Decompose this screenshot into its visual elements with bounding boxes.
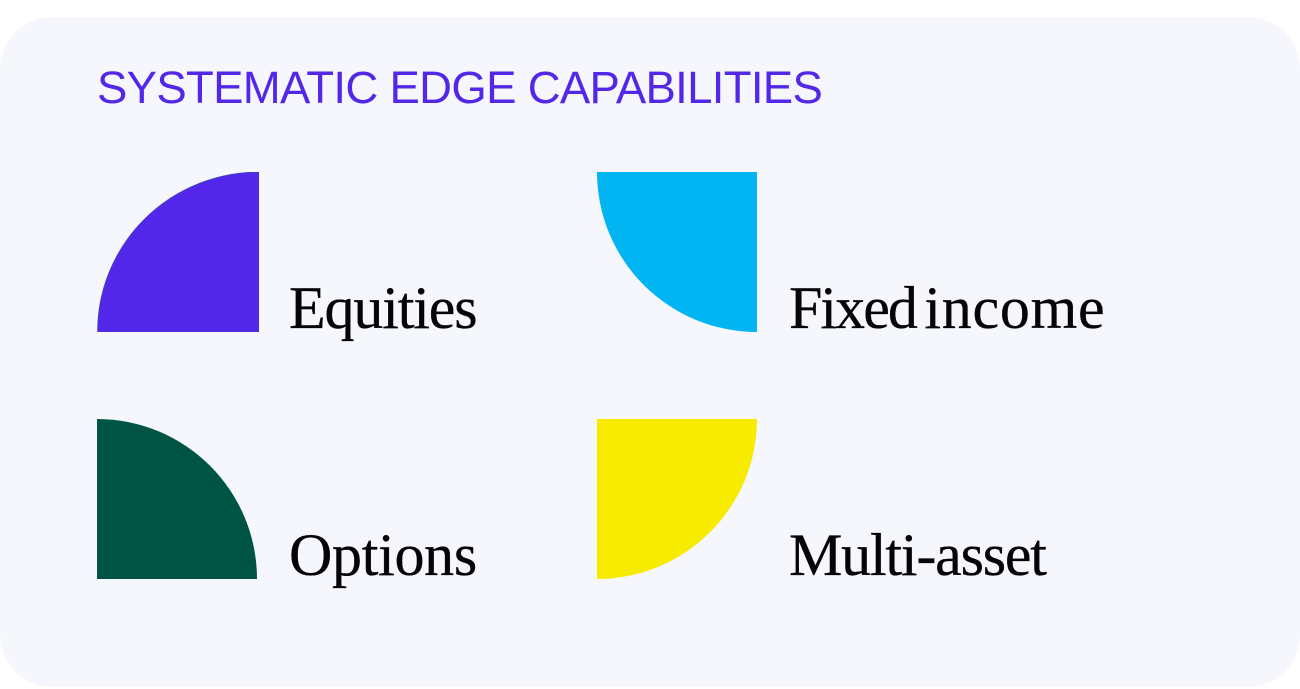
icon: options quarter circle <box>97 419 257 579</box>
title: SYSTEMATIC EDGE CAPABILITIES <box>97 62 822 113</box>
label: options: Options <box>289 522 477 588</box>
icon: multi-asset quarter circle <box>597 419 757 579</box>
label: multi-asset: Multi-asset <box>789 522 1046 588</box>
label: fixed income: Fixed income <box>789 275 1105 341</box>
icon: fixed income quarter circle <box>597 172 757 332</box>
label: equities: Equities <box>289 275 476 341</box>
icon: equities quarter circle <box>97 172 259 332</box>
